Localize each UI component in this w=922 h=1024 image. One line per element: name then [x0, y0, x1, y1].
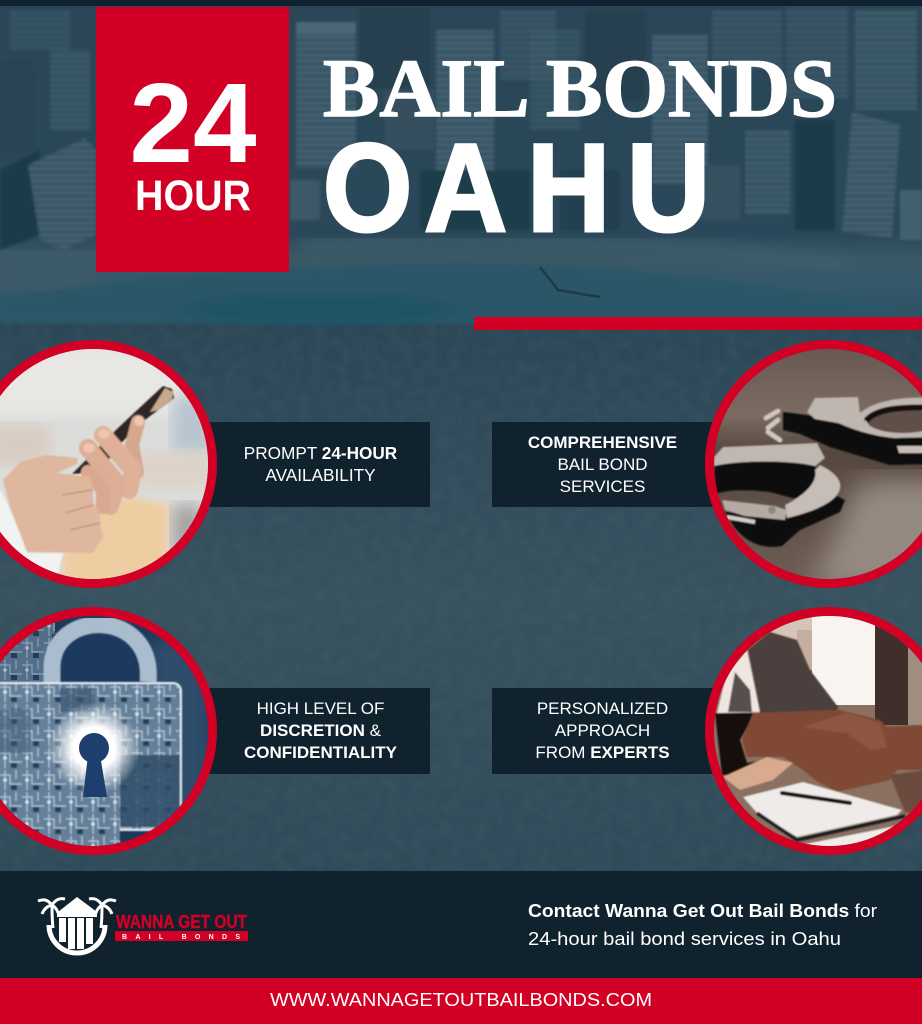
- label panel: comprehensive services: [492, 422, 717, 507]
- label panel: prompt availability: [205, 422, 430, 507]
- label panel: personalized approach: FROM EXPERTS: [535, 743, 670, 762]
- red badge: 24 hour: 24: [130, 60, 257, 186]
- top dark strip: [0, 0, 922, 6]
- photo circle: hands holding phone: [0, 340, 220, 590]
- label panel: discretion: DISCRETION &: [260, 721, 381, 740]
- hero: aerial photo of Waikiki skyline and beach: [0, 6, 922, 324]
- contact call to action: [528, 900, 877, 949]
- label panel: discretion: CONFIDENTIALITY: [244, 743, 398, 762]
- label panel: comprehensive services: SERVICES: [560, 477, 645, 496]
- contact call to action: Contact Wanna Get Out Bail Bonds for: [528, 900, 877, 921]
- logo tagline: [115, 931, 248, 941]
- label panel: prompt availability: AVAILABILITY: [265, 465, 376, 485]
- website strip: [0, 978, 922, 1024]
- title: BAIL BONDS: [323, 42, 837, 134]
- contact call to action: 24-hour bail bond services in Oahu: [528, 928, 841, 949]
- label panel: prompt availability: PROMPT 24-HOUR: [244, 443, 397, 463]
- logo: Wanna Get Out Bail Bonds: [38, 897, 248, 953]
- label panel: personalized approach: APPROACH: [555, 721, 650, 740]
- logo tagline: BAIL BONDS: [122, 934, 240, 941]
- photo circle: digital padlock: [0, 607, 220, 857]
- photo circle: handcuffs: [705, 340, 922, 590]
- label panel: discretion: HIGH LEVEL OF: [257, 699, 384, 718]
- footer band: [0, 871, 922, 978]
- label panel: personalized approach: PERSONALIZED: [537, 699, 668, 718]
- red badge: 24 hour: HOUR: [135, 172, 251, 220]
- website strip: WWW.WANNAGETOUTBAILBONDS.COM: [270, 989, 652, 1010]
- logo emblem: [38, 897, 116, 953]
- red badge: 24 hour: [96, 7, 289, 272]
- red accent bar: [474, 317, 922, 330]
- label panel: discretion: [205, 688, 430, 774]
- title: [323, 42, 837, 258]
- label panel: personalized approach: [492, 688, 717, 774]
- label panel: comprehensive services: COMPREHENSIVE: [528, 433, 677, 452]
- photo circle: business handshake: [705, 607, 922, 860]
- title: OAHU: [323, 119, 710, 258]
- label panel: comprehensive services: BAIL BOND: [557, 455, 648, 474]
- logo wordmark: WANNA GET OUT: [116, 912, 247, 932]
